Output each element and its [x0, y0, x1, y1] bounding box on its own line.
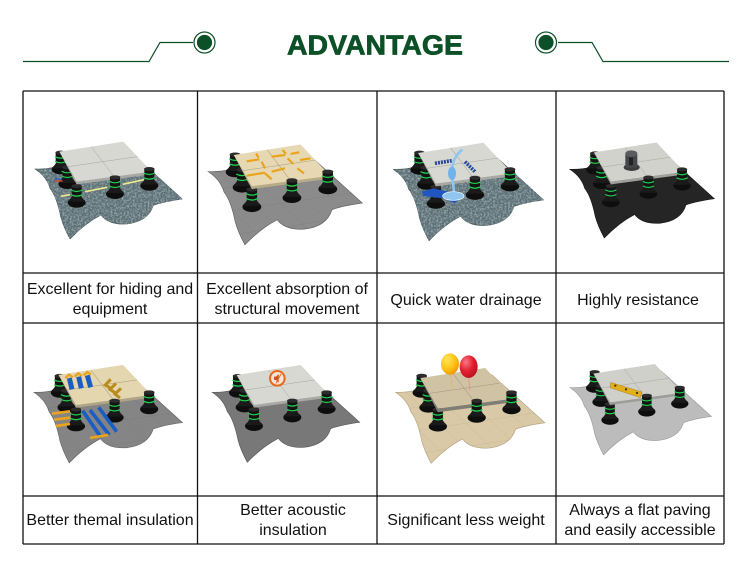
caption: Quick water drainage	[390, 292, 542, 309]
caption: Better themal insulation	[26, 512, 194, 529]
panel: acoustic insulation	[212, 365, 360, 539]
title: ADVANTAGE	[287, 29, 463, 60]
blue and orange heat arrows	[52, 372, 121, 438]
scene: pedestal floor on grey membrane	[208, 145, 362, 245]
scene: pedestal floor on beige membrane	[396, 368, 545, 463]
header: right connector with dot	[536, 32, 729, 62]
caption: Excellent for hiding and	[27, 281, 193, 298]
icon: heavy weight on tile	[624, 150, 640, 171]
panel: high resistance	[570, 143, 714, 309]
caption: equipment	[73, 301, 148, 318]
scene: pedestal floor on blue-grey membrane	[393, 143, 544, 241]
caption: Better acoustic	[240, 502, 346, 519]
panel: thermal insulation	[26, 365, 194, 529]
panel: structural movement	[206, 145, 368, 318]
icon: muted sound	[270, 371, 285, 386]
panel: water drainage	[390, 143, 544, 309]
caption: structural movement	[215, 301, 360, 318]
caption: Always a flat paving	[569, 502, 711, 519]
panel: less weight	[387, 353, 545, 529]
scene: pedestal floor on grey membrane	[34, 365, 182, 463]
caption: insulation	[259, 522, 327, 539]
icon: balloons	[441, 353, 478, 391]
header: left connector with dot	[23, 32, 215, 62]
water stream and drain	[422, 149, 475, 203]
table grid	[23, 91, 724, 544]
scene: pedestal floor on blue-grey membrane	[35, 142, 182, 239]
caption: Highly resistance	[577, 292, 699, 309]
cables under floor	[54, 179, 144, 196]
scene: pedestal floor on light grey membrane	[570, 364, 711, 455]
scene: pedestal floor on dark grey membrane	[212, 365, 360, 462]
panel: hiding and equipment	[27, 142, 193, 318]
scene: pedestal floor on black membrane	[570, 143, 714, 238]
caption: and easily accessible	[564, 522, 716, 539]
panel: flat paving	[564, 364, 716, 539]
caption: Excellent absorption of	[206, 281, 368, 298]
orange movement marks	[247, 150, 311, 179]
caption: Significant less weight	[387, 512, 545, 529]
icon: spirit level	[610, 382, 642, 398]
